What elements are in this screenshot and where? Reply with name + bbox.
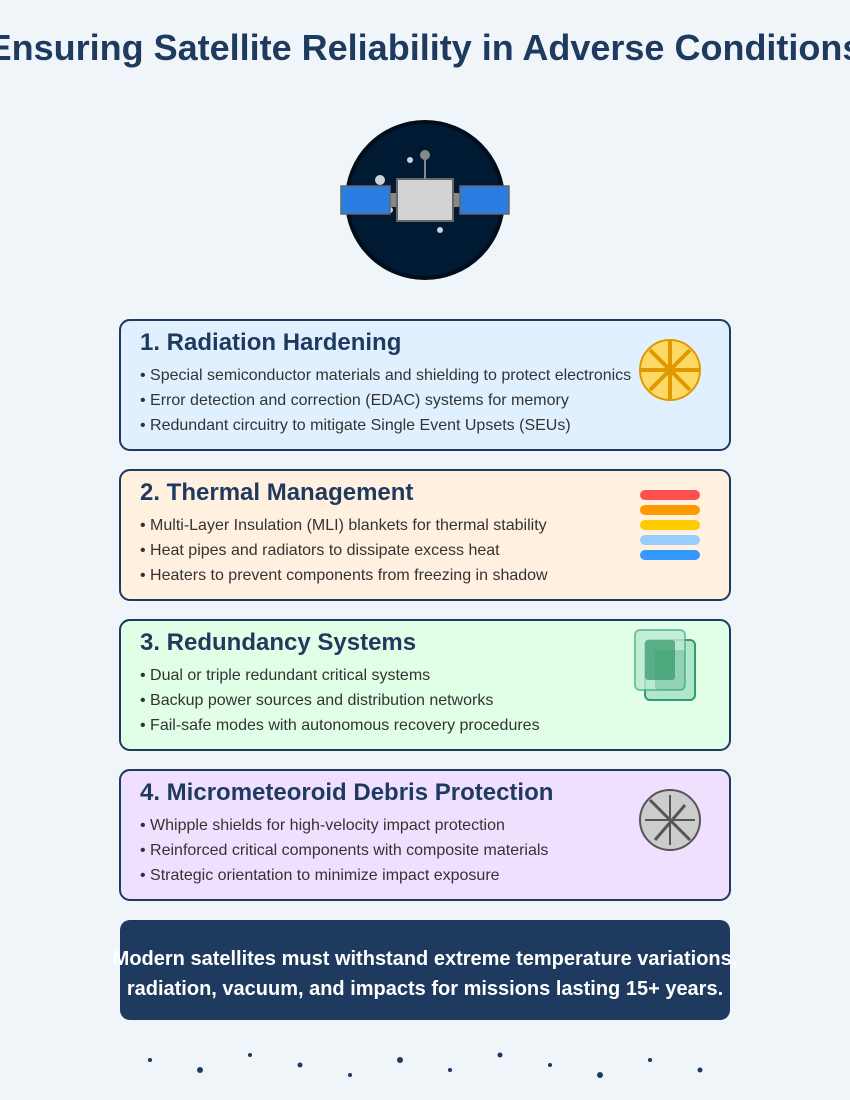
text block: radiation bullets: • Error detection and correction (EDAC) systems for memory (140, 392, 569, 409)
title: Ensuring Satellite Reliability in Adverse Conditions (0, 27, 850, 68)
callout: summary banner: Modern satellites must withstand extreme temperature variations, (113, 948, 737, 970)
icon: thermal layers (640, 490, 700, 560)
text block: debris bullets: • Whipple shields for high-velocity impact protection (140, 817, 505, 834)
icon: redundant layers (635, 630, 695, 700)
heading: redundancy systems: 3. Redundancy Systems (140, 629, 416, 656)
text block: debris bullets: • Reinforced critical components with composite materials (140, 842, 548, 859)
text block: redundancy bullets: • Fail-safe modes with autonomous recovery procedures (140, 717, 540, 734)
panel: redundancy systems (120, 620, 730, 750)
text block: radiation bullets: • Special semiconductor materials and shielding to protect electronics (140, 367, 631, 384)
callout: summary banner (113, 920, 737, 1020)
text block: radiation bullets: • Redundant circuitry to mitigate Single Event Upsets (SEUs) (140, 417, 571, 434)
text block: redundancy bullets: • Backup power sources and distribution networks (140, 692, 493, 709)
heading: radiation hardening: 1. Radiation Hardening (140, 329, 401, 356)
callout: summary banner: radiation, vacuum, and impacts for missions lasting 15+ years. (127, 978, 723, 1000)
heading: thermal management: 2. Thermal Management (140, 479, 413, 506)
heading: debris protection: 4. Micrometeoroid Debris Protection (140, 779, 553, 806)
icon: satellite in space (341, 122, 509, 278)
text block: thermal bullets: • Heaters to prevent components from freezing in shadow (140, 567, 548, 584)
text block: redundancy bullets: • Dual or triple redundant critical systems (140, 667, 430, 684)
text block: redundancy bullets (140, 667, 540, 734)
text block: thermal bullets: • Multi-Layer Insulation (MLI) blankets for thermal stability (140, 517, 547, 534)
decorative dots row (148, 1052, 702, 1078)
text block: thermal bullets (140, 517, 548, 584)
text block: thermal bullets: • Heat pipes and radiators to dissipate excess heat (140, 542, 500, 559)
panel: radiation hardening (120, 320, 730, 450)
icon: debris shield (640, 790, 700, 850)
icon: radiation (640, 340, 700, 400)
panel: thermal management (120, 470, 730, 600)
panel: micrometeoroid debris protection (120, 770, 730, 900)
text block: radiation bullets (140, 367, 631, 434)
text block: debris bullets: • Strategic orientation to minimize impact exposure (140, 867, 500, 884)
text block: debris bullets (140, 817, 548, 884)
